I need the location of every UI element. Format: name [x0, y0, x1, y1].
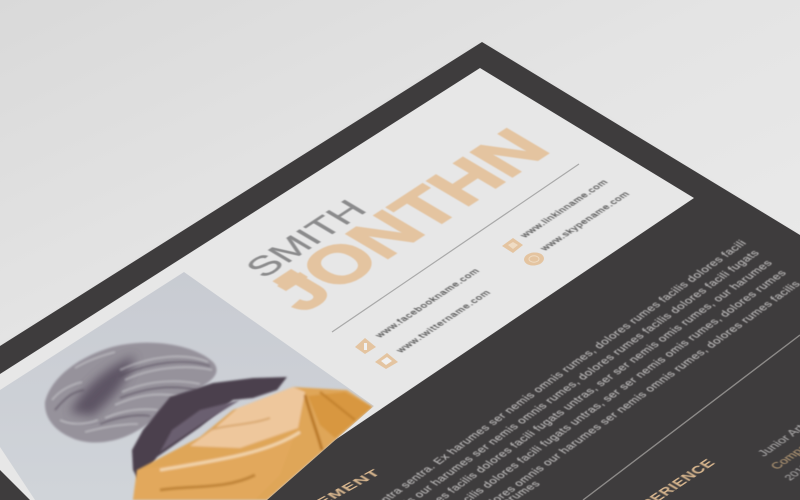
photo: model with knit hat and orange sweater: [0, 270, 380, 500]
skype url: www.skypename.com: [537, 190, 632, 253]
name: JONTHN: JONTHN: [249, 119, 565, 322]
icon: skype: [523, 252, 545, 266]
contact: linkedin: [502, 178, 611, 253]
name: SMITH: SMITH: [237, 195, 375, 283]
icon: twitter: [375, 353, 398, 369]
dark scarf: [132, 377, 287, 483]
twitter url: www.twittername.com: [393, 289, 493, 355]
contact: twitter: [375, 289, 493, 369]
knit hat: [45, 343, 217, 443]
contact: skype: [523, 190, 632, 266]
header divider line: [332, 164, 579, 332]
icon: facebook: [355, 338, 376, 354]
facebook url: www.facebookname.com: [372, 267, 482, 340]
icon: linkedin: [502, 238, 523, 253]
contact: facebook: [355, 267, 482, 354]
section divider line: [583, 335, 800, 500]
linkedin url: www.linkinname.com: [517, 178, 611, 240]
header panel: [0, 68, 694, 500]
orange sweater: [133, 387, 373, 500]
